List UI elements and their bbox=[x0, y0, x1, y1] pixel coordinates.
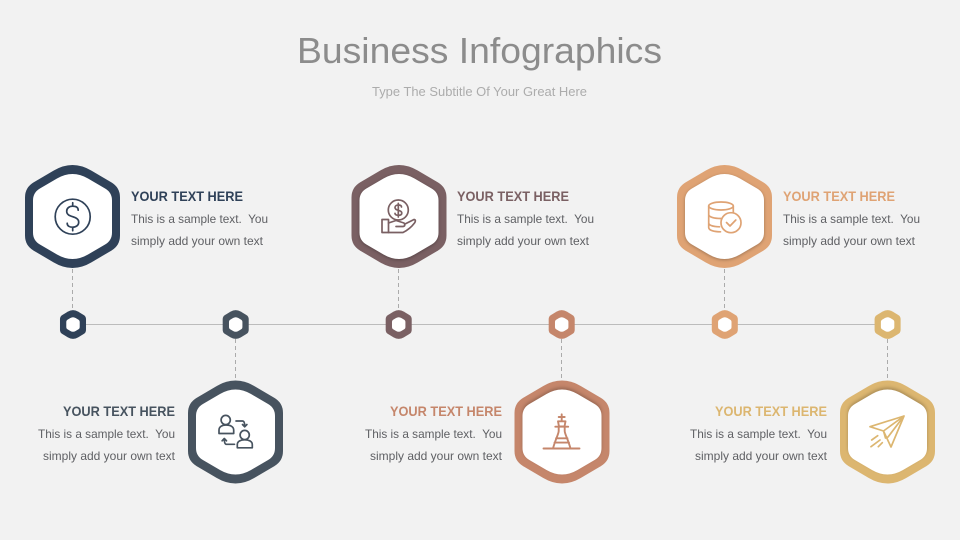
timeline node 4 bbox=[549, 310, 575, 339]
text: step 5: simply add your own text bbox=[783, 234, 916, 248]
panel: step 5 bbox=[677, 165, 920, 268]
text: step 2 bbox=[38, 403, 176, 463]
text: step 6: YOUR TEXT HERE bbox=[715, 403, 827, 419]
text: step 5 bbox=[783, 188, 920, 248]
panel: step 6 bbox=[690, 380, 935, 484]
hexagon badge 3 bbox=[352, 165, 446, 268]
timeline line bbox=[73, 324, 887, 326]
timeline node 5 bbox=[712, 310, 738, 339]
icon: database check bbox=[709, 202, 741, 233]
timeline node 6 bbox=[875, 310, 901, 339]
icon: chess king bbox=[544, 414, 580, 448]
text: step 3 bbox=[457, 188, 594, 248]
hexagon badge 1 bbox=[25, 165, 120, 268]
panel: step 4 bbox=[365, 380, 610, 484]
text: step 1 bbox=[131, 188, 268, 248]
text: step 3: YOUR TEXT HERE bbox=[457, 188, 569, 204]
timeline node 3 bbox=[386, 310, 412, 339]
subtitle: Type The Subtitle Of Your Great Here bbox=[372, 84, 587, 99]
text: step 2: simply add your own text bbox=[43, 449, 176, 463]
text: step 3: simply add your own text bbox=[457, 234, 590, 248]
text: step 6: This is a sample text. You bbox=[690, 427, 827, 441]
hexagon badge 2 bbox=[188, 380, 283, 484]
text: step 4: simply add your own text bbox=[370, 449, 503, 463]
text: step 1: This is a sample text. You bbox=[131, 212, 268, 226]
text: step 3: This is a sample text. You bbox=[457, 212, 594, 226]
icon: people exchange bbox=[219, 415, 252, 448]
timeline node 1 bbox=[60, 310, 86, 339]
panel: step 2 bbox=[38, 380, 283, 484]
icon: paper plane bbox=[870, 416, 904, 447]
text: step 1: YOUR TEXT HERE bbox=[131, 188, 243, 204]
text: step 4 bbox=[365, 403, 503, 463]
text: step 4: This is a sample text. You bbox=[365, 427, 502, 441]
text: step 2: This is a sample text. You bbox=[38, 427, 175, 441]
timeline node 2 bbox=[223, 310, 249, 339]
hexagon badge 4 bbox=[514, 380, 610, 484]
icon: dollar coin bbox=[55, 199, 90, 234]
text: step 5: This is a sample text. You bbox=[783, 212, 920, 226]
hexagon badge 5 bbox=[677, 165, 772, 268]
text: step 5: YOUR TEXT HERE bbox=[783, 188, 895, 204]
text: step 2: YOUR TEXT HERE bbox=[63, 403, 175, 419]
text: step 4: YOUR TEXT HERE bbox=[390, 403, 502, 419]
title: Business Infographics bbox=[297, 30, 662, 71]
panel: step 1 bbox=[25, 165, 268, 268]
text: step 6: simply add your own text bbox=[695, 449, 828, 463]
hexagon badge 6 bbox=[840, 380, 935, 484]
panel: step 3 bbox=[352, 165, 594, 268]
text: step 6 bbox=[690, 403, 828, 463]
icon: hand holding coin bbox=[382, 200, 415, 232]
text: step 1: simply add your own text bbox=[131, 234, 264, 248]
